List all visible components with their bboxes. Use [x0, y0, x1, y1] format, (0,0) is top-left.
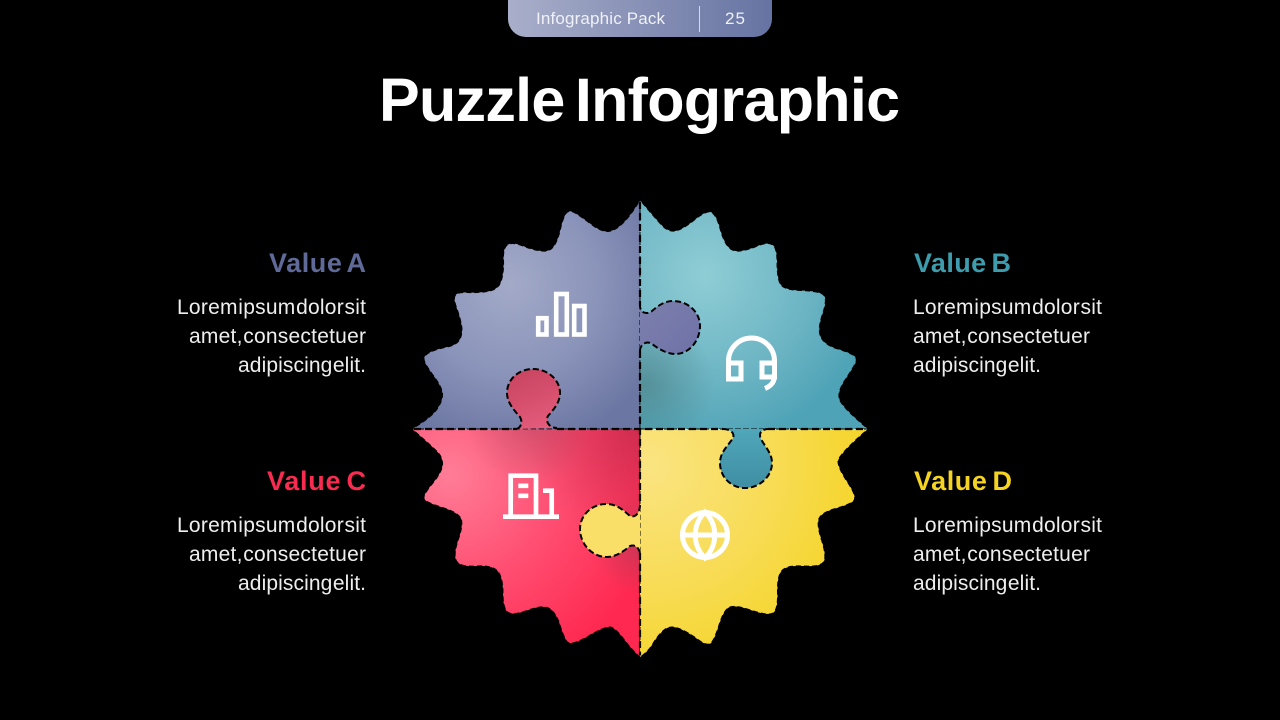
text block: Value B: Lorem ipsum dolor sit: [913, 296, 1102, 319]
text block: Value C: Lorem ipsum dolor sit: [177, 514, 366, 537]
tab: C into A: [507, 369, 560, 429]
puzzle: [412, 200, 868, 657]
text block: Value D: amet, consectetuer: [913, 543, 1090, 566]
text block: Value D: Value D: [914, 466, 1012, 496]
seam dashes: [414, 202, 866, 655]
text block: Value D: [913, 466, 1102, 595]
piece D: [640, 429, 868, 657]
icon: headset: [728, 338, 774, 388]
text block: Value C: Value C: [267, 466, 366, 496]
title: Puzzle Infographic: [379, 66, 900, 134]
text block: Value A: Lorem ipsum dolor sit: [177, 296, 366, 319]
icon: globe: [682, 512, 728, 558]
text block: Value C: [177, 466, 366, 595]
text block: Value A: Value A: [269, 248, 366, 278]
piece A: [412, 200, 640, 429]
text block: Value C: amet, consectetuer: [189, 543, 366, 566]
text block: Value C: adipiscing elit.: [238, 572, 366, 595]
pack name: Infographic Pack: [536, 9, 666, 28]
text block: Value D: Lorem ipsum dolor sit: [913, 514, 1102, 537]
text block: Value B: Value B: [914, 248, 1011, 278]
text block: Value A: adipiscing elit.: [238, 354, 366, 377]
icon: bar chart: [538, 294, 584, 334]
text block: Value B: [913, 248, 1102, 377]
text block: Value B: amet, consectetuer: [913, 325, 1090, 348]
piece C: [412, 429, 640, 657]
text block: Value D: adipiscing elit.: [913, 572, 1041, 595]
text block: Value A: amet, consectetuer: [189, 325, 366, 348]
tab: A into B: [640, 301, 700, 354]
header pill: [508, 0, 772, 37]
text block: Value A: [177, 248, 366, 377]
piece B: [640, 200, 868, 429]
page number: 25: [725, 9, 745, 28]
tab: D into C: [580, 504, 640, 557]
tab: B into D: [720, 429, 772, 488]
text block: Value B: adipiscing elit.: [913, 354, 1041, 377]
icon: building: [503, 476, 559, 517]
